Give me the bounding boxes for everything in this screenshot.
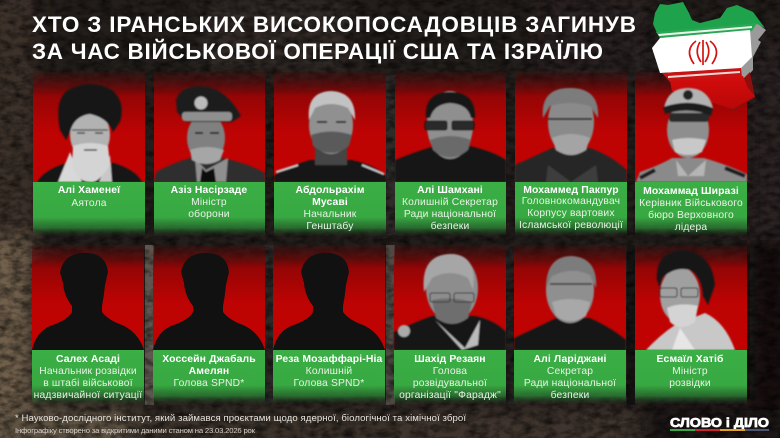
- caption: оборони: [188, 208, 230, 220]
- red panel: [515, 72, 627, 182]
- card: Абдольрахім Мусаві: [274, 72, 386, 236]
- caption: бюро Верховного: [648, 209, 734, 221]
- portrait: [395, 91, 506, 182]
- silhouette: [273, 253, 385, 350]
- caption: Керівник Військового: [639, 198, 743, 209]
- caption: Ісламської революції: [519, 220, 623, 231]
- caption: Шахід Резаян: [414, 354, 486, 365]
- card: Есмаїл Хатіб: [635, 245, 747, 404]
- portrait: [37, 84, 142, 182]
- caption: Азіз Насірзаде: [171, 185, 247, 196]
- red panel: [153, 245, 265, 350]
- caption: Міністр: [672, 366, 708, 377]
- caption: надзвичайної ситуації: [34, 390, 142, 401]
- caption: Алі Ларіджані: [533, 354, 607, 365]
- emblem: [689, 40, 717, 65]
- caption: Начальник розвідки: [39, 366, 137, 377]
- caption: Мохаммед Пакпур: [523, 185, 619, 196]
- portrait: [646, 250, 735, 350]
- caption: Ради національної: [404, 209, 496, 220]
- card: Мохаммад Ширазі: [635, 88, 747, 236]
- portrait: [636, 88, 747, 182]
- caption: Мохаммад Ширазі: [643, 186, 739, 197]
- caption: Ради національної: [524, 378, 616, 389]
- red panel: Мохаммад Ширазі: [635, 72, 747, 182]
- caption: розвідувальної: [413, 378, 487, 389]
- caption: [635, 182, 747, 236]
- red panel: [635, 245, 747, 350]
- portrait: [514, 256, 626, 350]
- caption: [394, 350, 506, 404]
- caption: Колишній: [306, 366, 352, 377]
- caption: Головнокомандувач: [522, 196, 620, 207]
- card: Азіз Насірзаде: [154, 72, 265, 236]
- caption: [273, 350, 385, 404]
- caption: [515, 182, 627, 236]
- caption: розвідки: [669, 378, 711, 389]
- silhouette: [32, 253, 144, 350]
- caption: в штабі військової: [43, 377, 133, 389]
- caption: Салех Асаді: [56, 354, 120, 365]
- caption: Секретар: [547, 366, 593, 377]
- caption: Аятола: [71, 198, 107, 209]
- caption: Абдольрахім: [296, 184, 364, 196]
- caption: [635, 350, 747, 404]
- portrait: [154, 86, 265, 182]
- map of Iran in flag colours: [652, 2, 766, 112]
- caption: безпеки: [551, 389, 589, 401]
- red panel: [154, 72, 265, 182]
- caption: безпеки: [431, 220, 469, 232]
- portrait: [274, 91, 386, 182]
- caption: [33, 182, 145, 236]
- card: Салех Асаді: [32, 245, 144, 404]
- card: Алі Шамхані: [395, 72, 506, 236]
- red panel: [274, 72, 386, 182]
- red panel: [394, 245, 506, 350]
- caption: Мусаві: [312, 197, 348, 208]
- caption: Хоссейн Джабаль: [162, 353, 256, 365]
- caption: Міністр: [191, 197, 227, 208]
- portrait: [394, 254, 506, 350]
- portrait: [515, 88, 627, 182]
- red panel: [273, 245, 385, 350]
- caption: Голова SPND*: [174, 378, 244, 389]
- caption: Голова: [433, 366, 467, 377]
- title: ЗА ЧАС ВІЙСЬКОВОЇ ОПЕРАЦІЇ США ТА ІЗРАЇЛЮ: [32, 39, 603, 64]
- silhouette: [153, 253, 265, 350]
- source note: Інфографіку створено за відкритими даними станом на 23.03.2026 рок: [15, 426, 256, 435]
- red panel: [32, 245, 144, 350]
- caption: Генштабу: [306, 220, 354, 232]
- card: Шахід Резаян: [394, 245, 506, 404]
- red panel: [514, 245, 626, 350]
- caption: Колишній Секретар: [402, 197, 498, 208]
- caption: [154, 182, 265, 236]
- caption: Есмаїл Хатіб: [656, 353, 724, 365]
- card: Алі Хаменеї: [33, 72, 145, 236]
- caption: [514, 350, 626, 404]
- card: Реза Мозаффарі-Ніа: [273, 245, 385, 404]
- caption: організації "Фарадж": [399, 390, 501, 401]
- red panel: [33, 72, 145, 182]
- caption: Амелян: [189, 366, 229, 377]
- caption: [395, 182, 506, 236]
- red panel: [395, 72, 506, 182]
- caption: Начальник: [304, 209, 357, 220]
- card: Мохаммед Пакпур: [515, 72, 627, 236]
- caption: Корпусу вартових: [527, 208, 615, 219]
- caption: [32, 350, 144, 404]
- card: Алі Ларіджані: [514, 245, 626, 404]
- logo: Слово і діло: СЛОВО і ДІЛО: [670, 416, 769, 430]
- caption: Алі Хаменеї: [58, 185, 121, 196]
- title: ХТО З ІРАНСЬКИХ ВИСОКОПОСАДОВЦІВ ЗАГИНУВ: [32, 12, 636, 37]
- caption: Голова SPND*: [294, 378, 364, 389]
- caption: лідера: [675, 222, 707, 233]
- footnote: * Науково-дослідного інститут, який займався проєктами щодо ядерної, біологічної та хімічної зброї: [15, 413, 466, 424]
- card: Хоссейн Джабаль Амелян: [153, 245, 265, 404]
- caption: Алі Шамхані: [417, 185, 483, 196]
- caption: Реза Мозаффарі-Ніа: [276, 353, 382, 365]
- caption: [274, 182, 386, 236]
- caption: [153, 350, 265, 404]
- title: [32, 12, 636, 64]
